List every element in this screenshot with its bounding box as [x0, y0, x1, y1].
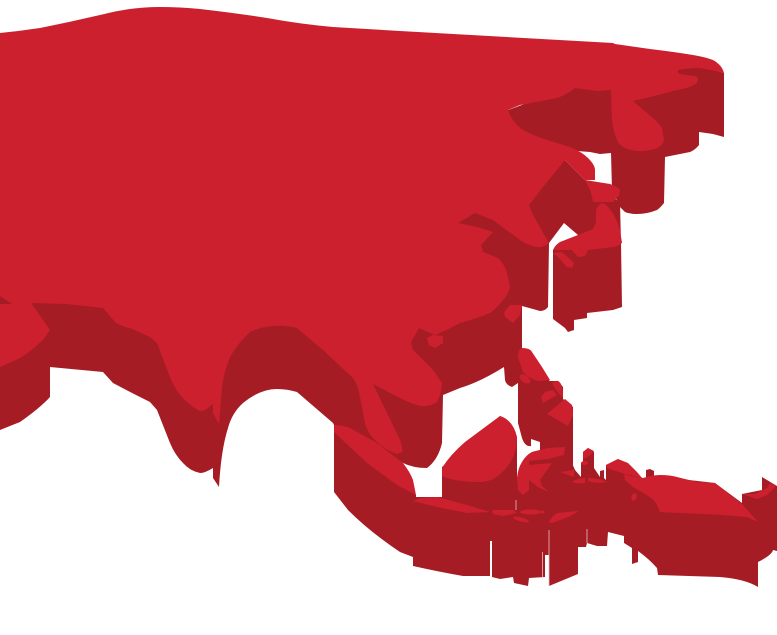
top surface: New Guinea [624, 474, 776, 522]
sub-element: small islet on the New Guinea side [630, 492, 638, 502]
pale seams between island columns [516, 500, 587, 586]
top surface: Sumatra [334, 425, 416, 495]
top surface: Java and lesser islands [413, 497, 578, 524]
top surface: Celebes and Moluccas [517, 447, 642, 495]
sub-element: Hainan islet [427, 335, 443, 348]
top surface: mainland Asia [0, 7, 724, 454]
top surface: Borneo [442, 416, 517, 482]
top surfaces: Taiwan, Philippines [504, 305, 573, 426]
top surfaces: Japan and Sakhalin [553, 180, 622, 268]
